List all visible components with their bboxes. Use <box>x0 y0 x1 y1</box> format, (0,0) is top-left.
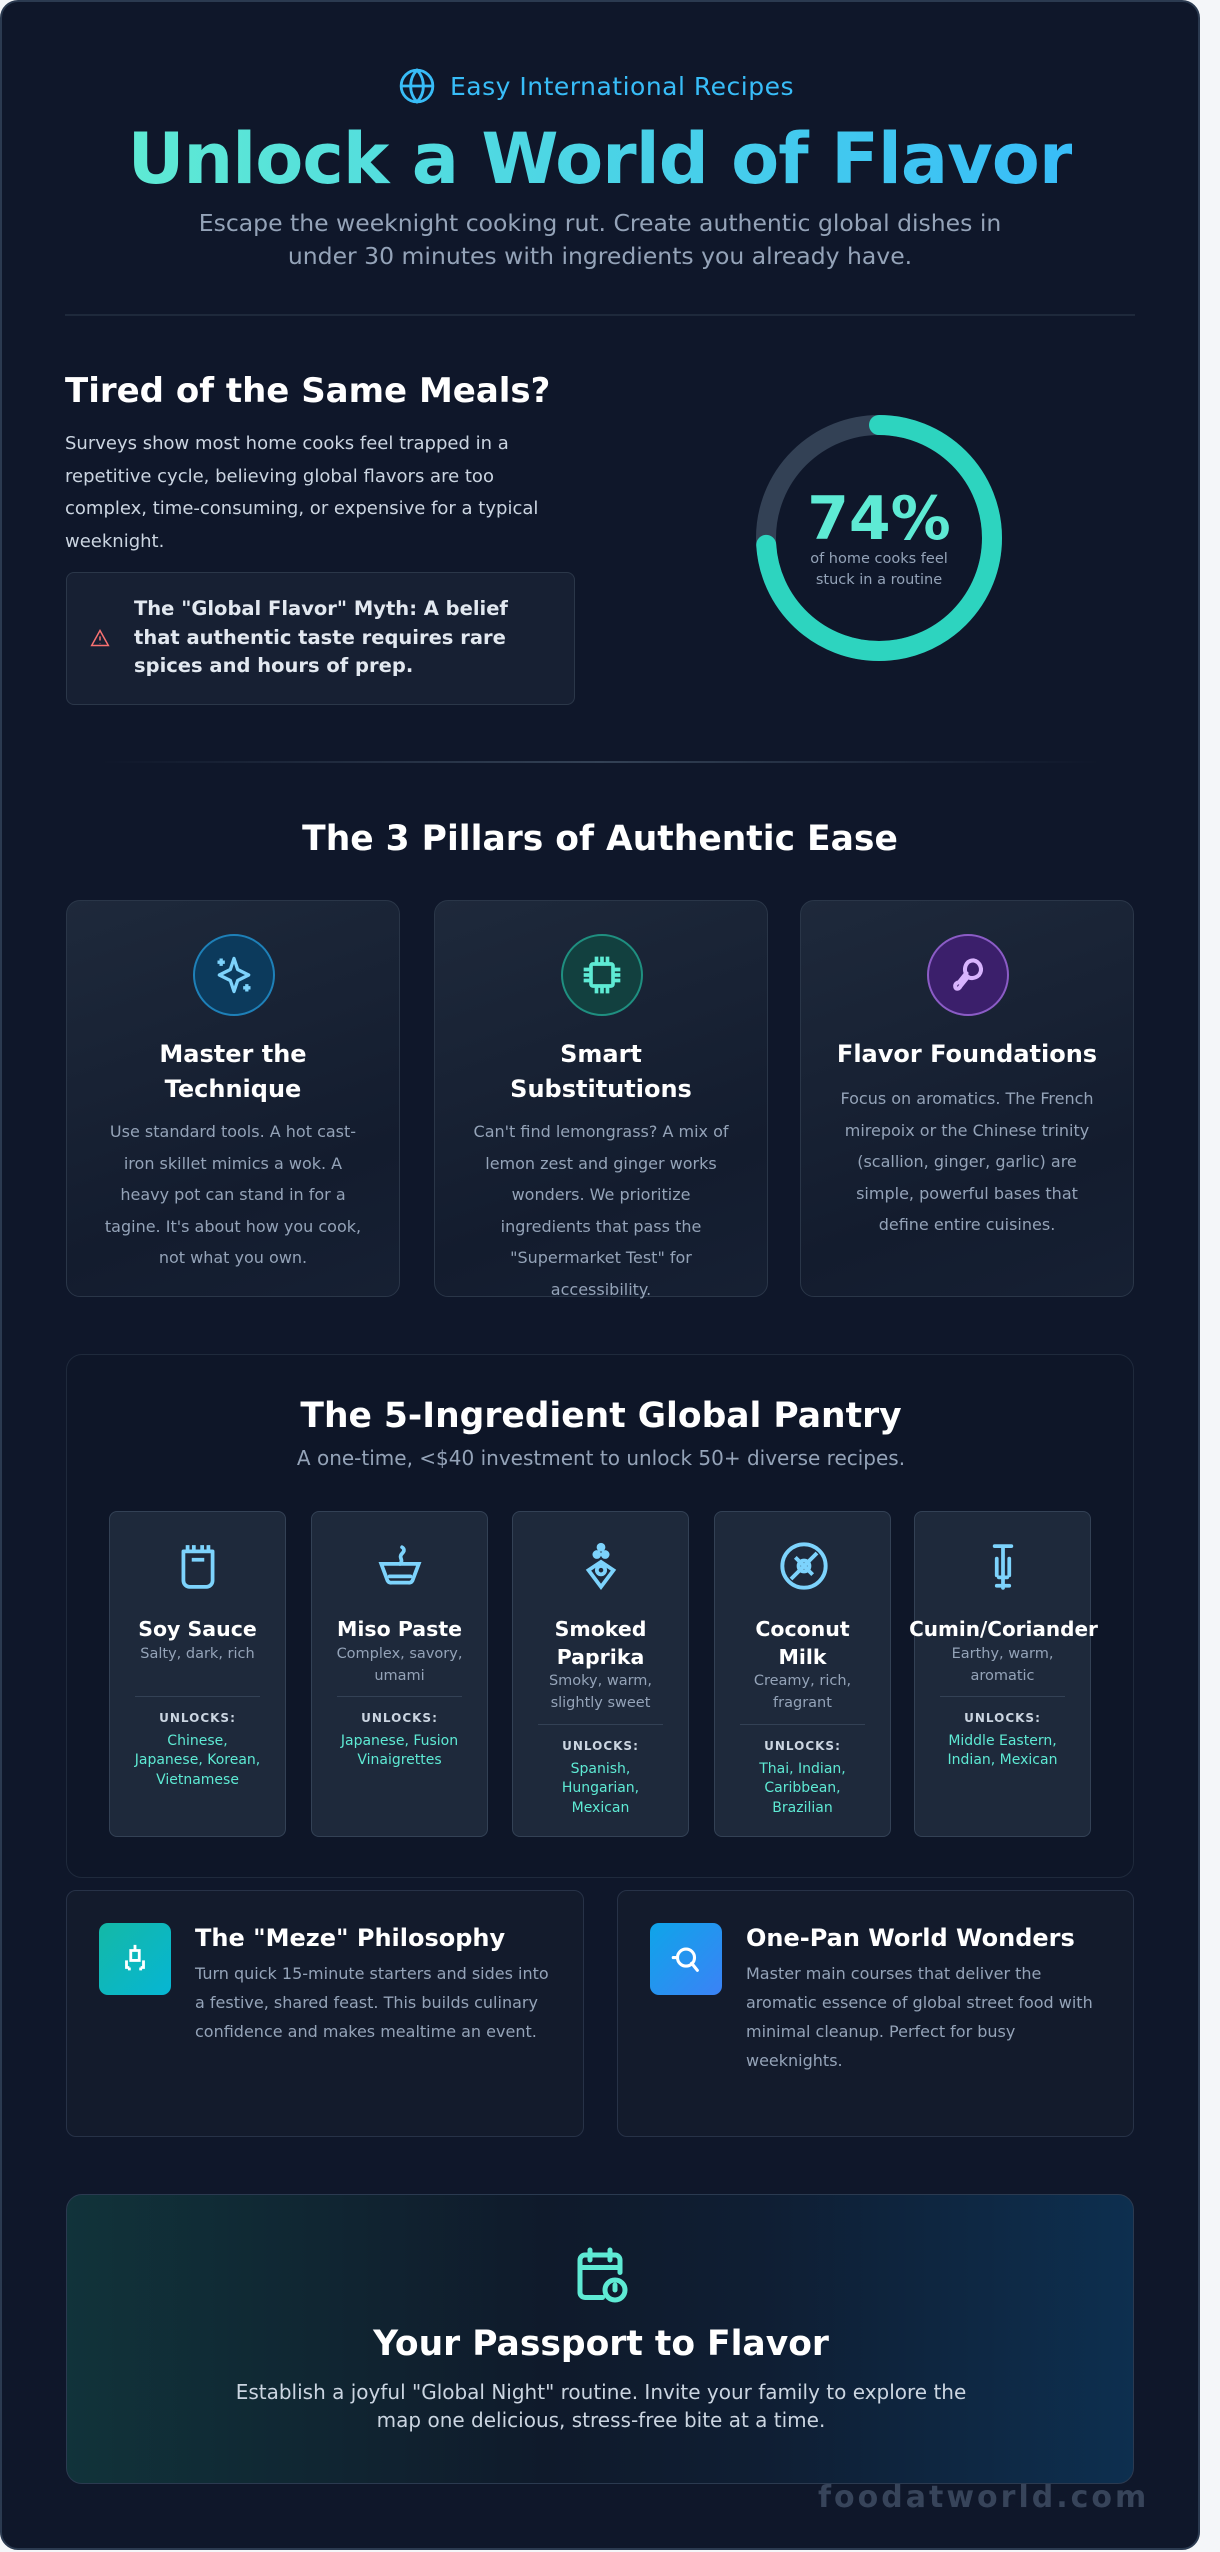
ingredient: soy sauce <box>109 1511 286 1837</box>
title: Unlock a World of Flavor <box>128 118 1072 200</box>
card: meze philosophy: The "Meze" Philosophy <box>195 1924 505 1952</box>
ingredient: coconut milk: Milk <box>778 1645 827 1669</box>
icon: drumstick <box>927 934 1009 1016</box>
ingredient: cumin/coriander <box>914 1511 1091 1837</box>
paragraph: Surveys show most home cooks feel trapped in a repetitive cycle, believing global flavors are too complex, time-consuming, or expensive for a typical weeknight. <box>65 433 538 552</box>
ingredient: soy sauce: UNLOCKS: <box>159 1711 236 1725</box>
subtitle: Escape the weeknight cooking rut. Create authentic global dishes in under 30 minutes with ingredients you already have. <box>199 209 1001 270</box>
ingredient: coconut milk <box>714 1511 891 1837</box>
pillar: smart substitutions: Smart <box>560 1040 642 1068</box>
ingredient: coconut milk: Brazilian <box>772 1800 833 1816</box>
ingredient: miso paste: Miso Paste <box>337 1617 462 1641</box>
body: Establish a joyful "Global Night" routine. Invite your family to explore the map one delicious, stress-free bite at a time. <box>236 2380 966 2432</box>
heading: Your Passport to Flavor <box>373 2324 829 2364</box>
icon: chip <box>561 934 643 1016</box>
ingredient: smoked paprika: Hungarian, <box>562 1780 639 1796</box>
ingredient: soy sauce: Salty, dark, rich <box>140 1646 255 1662</box>
icon: sparkle <box>193 934 275 1016</box>
icon: warning <box>90 629 110 646</box>
ingredient: cumin/coriander: Earthy, warm, aromatic <box>952 1646 1053 1684</box>
watermark: foodatworld.com <box>818 2480 1149 2515</box>
ingredient: smoked paprika: Mexican <box>572 1800 629 1816</box>
pillar: smart substitutions: Substitutions <box>510 1075 692 1103</box>
icon: calendar clock <box>578 2248 628 2302</box>
ingredient: coconut milk: Caribbean, <box>764 1780 841 1796</box>
ingredient: soy sauce: Chinese, <box>167 1732 228 1748</box>
pillar: flavor foundations: Focus on aromatics. The French mirepoix or the Chinese trinity (scallion, ginger, garlic) are simple, powerful bases that define entire cuisines. <box>840 1089 1094 1234</box>
icon: grinder <box>992 1544 1014 1590</box>
ingredient: soy sauce: Vietnamese <box>156 1772 239 1788</box>
ingredient: coconut milk: Thai, Indian, <box>759 1760 846 1776</box>
ingredient: miso paste: Japanese, Fusion <box>341 1732 458 1748</box>
heading: 3 pillars: The 3 Pillars of Authentic Ease <box>302 819 898 859</box>
pillar: master the technique: Technique <box>165 1075 301 1103</box>
ingredient: soy sauce: Soy Sauce <box>138 1617 257 1641</box>
panel: global pantry <box>66 1354 1134 1878</box>
icon: bowl <box>378 1545 422 1585</box>
ingredient: miso paste <box>311 1511 488 1837</box>
pillar: master the technique: Master the <box>159 1040 307 1068</box>
ingredient: smoked paprika: Spanish, <box>571 1760 630 1776</box>
ingredient: smoked paprika: Paprika <box>557 1645 644 1669</box>
icon: spice <box>586 1542 616 1590</box>
ingredient: cumin/coriander: UNLOCKS: <box>964 1711 1041 1725</box>
pillar: master the technique <box>66 900 400 1297</box>
ingredient: cumin/coriander: Indian, Mexican <box>948 1752 1057 1768</box>
donut chart: 74%: of home cooks feel stuck in a routine <box>810 551 948 588</box>
ingredient: miso paste: Vinaigrettes <box>357 1752 442 1768</box>
header tagline: Easy International Recipes <box>450 72 794 100</box>
ingredient: smoked paprika: UNLOCKS: <box>562 1739 639 1753</box>
callout: myth: The "Global Flavor" Myth: A belief that authentic taste requires rare spices and hours of prep. <box>134 597 508 677</box>
pillar: smart substitutions <box>434 900 768 1297</box>
card: one-pan: Master main courses that deliver the aromatic essence of global street food with minimal cleanup. Perfect for busy weeknights. <box>746 1964 1093 2070</box>
ingredient: cumin/coriander: Middle Eastern, <box>948 1732 1057 1748</box>
ingredient: soy sauce: Japanese, Korean, <box>135 1752 260 1768</box>
ingredient: smoked paprika: Smoked <box>555 1617 646 1641</box>
ingredient: coconut milk: Creamy, rich, fragrant <box>754 1673 851 1711</box>
ingredient: coconut milk: Coconut <box>755 1617 850 1641</box>
card: one-pan: One-Pan World Wonders <box>746 1924 1075 1952</box>
icon: teal square <box>99 1923 171 1995</box>
card: one-pan <box>617 1890 1134 2137</box>
callout: passport to flavor <box>66 2194 1134 2484</box>
icon: coconut <box>780 1542 828 1590</box>
icon: blue square <box>650 1923 722 1995</box>
heading: Tired of the Same Meals? <box>65 371 550 411</box>
heading: The 5-Ingredient Global Pantry <box>300 1396 902 1436</box>
pillar: smart substitutions: Can't find lemongrass? A mix of lemon zest and ginger works wonders. We prioritize ingredients that pass the "Supermarket Test" for accessibility. <box>474 1122 728 1298</box>
card: meze philosophy: Turn quick 15-minute starters and sides into a festive, shared feast. This builds culinary confidence and makes mealtime an event. <box>195 1964 549 2041</box>
ingredient: coconut milk: UNLOCKS: <box>764 1739 841 1753</box>
card: meze philosophy <box>66 1890 584 2137</box>
subheading: A one-time, <$40 investment to unlock 50+ diverse recipes. <box>297 1446 905 1470</box>
pillar: master the technique: Use standard tools. A hot cast-iron skillet mimics a wok. A heavy pot can stand in for a tagine. It's about how you cook, not what you own. <box>105 1122 361 1267</box>
ingredient: miso paste: Complex, savory, umami <box>337 1646 462 1684</box>
donut chart: 74%: 74% <box>807 484 951 554</box>
icon: globe <box>400 68 434 104</box>
callout: myth <box>66 572 575 705</box>
ingredient: smoked paprika: Smoky, warm, slightly sweet <box>549 1673 652 1711</box>
pillar: flavor foundations <box>800 900 1134 1297</box>
pillar: flavor foundations: Flavor Foundations <box>837 1040 1097 1068</box>
ingredient: cumin/coriander: Cumin/Coriander <box>909 1617 1098 1641</box>
ingredient: miso paste: UNLOCKS: <box>361 1711 438 1725</box>
icon: bottle <box>182 1545 214 1589</box>
ingredient: smoked paprika <box>512 1511 689 1837</box>
section: tired of same meals <box>65 371 550 552</box>
donut chart: 74% <box>756 415 1002 661</box>
